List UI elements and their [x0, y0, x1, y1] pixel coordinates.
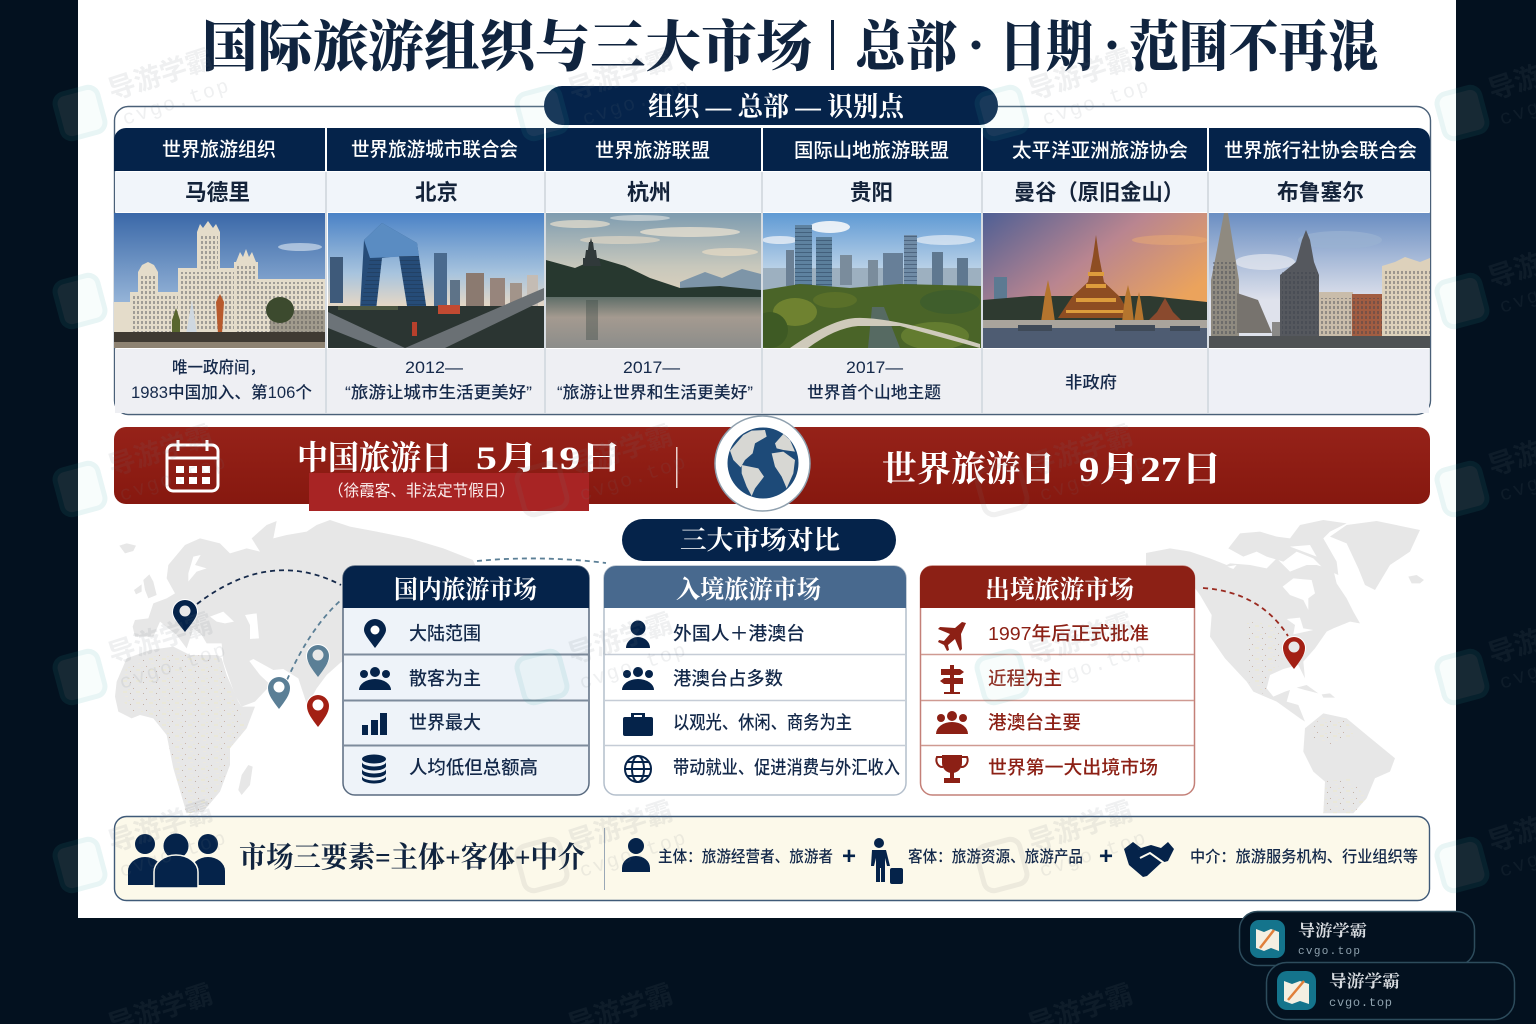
plus sign: + [1099, 843, 1113, 870]
photo: Beijing CCTV skyline [328, 213, 544, 348]
panel: outbound market: 1997年后正式批准 [988, 623, 1149, 644]
banner: tourism days [114, 416, 1430, 511]
watermarks: 导游学霸 [105, 44, 217, 106]
heading: three elements formula: 市场三要素=主体+客体+中介 [239, 841, 585, 874]
panel: domestic market: 人均低但总额高 [409, 757, 538, 778]
World tourism day text: 世界旅游日 [882, 450, 1055, 489]
logo card upper: 导游学霸 [1298, 922, 1367, 940]
icon: group [359, 667, 391, 690]
watermarks: 导游学霸 [565, 420, 677, 482]
watermarks: cvgo.top [1040, 75, 1154, 132]
watermarks: cvgo.top [1037, 451, 1151, 508]
watermarks: cvgo.top [1037, 827, 1151, 884]
watermarks: 导游学霸 [565, 44, 677, 106]
notes row: 1983中国加入、第106个 [131, 383, 312, 402]
icon: group [622, 667, 654, 690]
panel: domestic market: 散客为主 [409, 668, 481, 689]
World tourism day text: 9月27日 [1079, 450, 1222, 489]
headquarters city row: 曼谷（原旧金山） [1014, 180, 1184, 205]
intermediary text: 中介：旅游服务机构、行业组织等 [1190, 848, 1418, 866]
watermarks: cvgo.top [577, 451, 691, 508]
object text: 客体：旅游资源、旅游产品 [908, 847, 1083, 866]
China tourism day text: 5月19日 [476, 441, 622, 477]
icon: handshake [1124, 842, 1174, 877]
icon: group [936, 711, 968, 734]
map pin: blue 1 [306, 644, 330, 677]
panel: outbound market: 世界第一大出境市场 [988, 757, 1158, 778]
panel: inbound market: 外国人＋港澳台 [673, 623, 805, 644]
headquarters city row: 北京 [415, 180, 458, 205]
logo card upper: cvgo.top [1298, 946, 1360, 958]
watermarks: 导游学霸 [565, 608, 677, 670]
panel: inbound market: 带动就业、促进消费与外汇收入 [673, 757, 900, 778]
watermarks: 导游学霸 [1025, 608, 1137, 670]
icon: signpost [940, 665, 964, 694]
title: 日期 [999, 3, 1093, 82]
photo: Hangzhou West Lake [546, 213, 761, 348]
world map: Americas [1146, 520, 1424, 813]
title: 范围不再混 [1129, 3, 1378, 82]
icon: traveller with luggage [871, 838, 903, 884]
logo card lower: cvgo.top [1329, 996, 1392, 1010]
China tourism day text [297, 440, 622, 477]
title: 国际旅游组织与三大市场 [202, 3, 812, 82]
icon: person [622, 838, 650, 872]
headquarters city row [115, 172, 1430, 212]
panel: domestic market: 国内旅游市场 [394, 576, 537, 604]
headquarters city row: 贵阳 [850, 180, 893, 205]
title [202, 3, 1378, 82]
map pin: navy [172, 599, 198, 632]
World tourism day text [882, 450, 1222, 489]
Africa speckled land tint [120, 652, 247, 813]
table header row: 世界旅游联盟 [595, 140, 710, 162]
subject text: 主体：旅游经营者、旅游者 [658, 848, 833, 866]
watermarks: cvgo.top [577, 827, 691, 884]
notes row: 2017— [846, 359, 904, 377]
icon: person [626, 620, 650, 648]
sub note [309, 473, 589, 511]
icon: three people [128, 833, 225, 888]
panel: organisations table [114, 86, 1430, 414]
watermarks: 导游学霸 [105, 420, 217, 482]
watermarks: cvgo.top [120, 75, 234, 132]
table header row: 太平洋亚洲旅游协会 [1012, 140, 1188, 162]
sub note: （徐霞客、非法定节假日） [328, 482, 515, 500]
icon: bars [362, 713, 387, 735]
notes row: 世界首个山地主题 [807, 383, 941, 402]
section pill: market comparison [622, 519, 896, 561]
panel: inbound market: 入境旅游市场 [676, 576, 821, 604]
watermarks: cvgo.top [580, 75, 694, 132]
icon: coins stack [362, 754, 386, 784]
icon: globe [715, 416, 810, 511]
map pin: red [306, 694, 330, 727]
notes row: “旅游让世界和生活更美好” [557, 383, 753, 402]
panel: domestic market [343, 566, 589, 795]
watermarks: cvgo.top [1037, 639, 1151, 696]
icon: globe grid [625, 756, 651, 782]
map pin: America red [1282, 636, 1306, 669]
icon: calendar [167, 440, 218, 491]
section pill: organisation heading: 组织 — 总部 — 识别点 [648, 92, 906, 122]
world map: Eurasia and Africa [115, 520, 477, 813]
headquarters city row: 马德里 [185, 180, 250, 205]
photo: Madrid palace [114, 213, 325, 348]
logo card lower [1266, 962, 1514, 1020]
icon: plane [938, 622, 966, 651]
panel: inbound market: 以观光、休闲、商务为主 [673, 712, 852, 733]
panel: outbound market: 近程为主 [988, 668, 1062, 689]
panel: outbound market [920, 566, 1195, 795]
Americas speckled land tint [1247, 622, 1367, 813]
watermarks: 导游学霸 [105, 608, 217, 670]
route arcs [197, 558, 1288, 680]
watermarks: cvgo.top [117, 451, 231, 508]
watermarks: 导游学霸 [1025, 796, 1137, 858]
plus sign: + [842, 843, 856, 870]
icon: trophy [936, 755, 968, 783]
watermarks: 导游学霸 [105, 796, 217, 858]
photo: Brussels Grand Place [1209, 213, 1430, 348]
logo icon [1277, 971, 1316, 1010]
watermarks: cvgo.top [117, 639, 231, 696]
panel: outbound market: 港澳台主要 [988, 712, 1081, 733]
watermarks: 导游学霸 [565, 796, 677, 858]
notes row: “旅游让城市生活更美好” [345, 383, 532, 402]
section pill: market comparison: 三大市场对比 [680, 526, 840, 555]
panel: inbound market [604, 566, 906, 795]
photo: Bangkok Wat Arun [983, 213, 1208, 348]
notes row: 非政府 [1065, 372, 1117, 392]
notes row: 2017— [623, 359, 681, 377]
logo icon [1250, 920, 1285, 958]
notes row: 唯一政府间， [172, 357, 265, 377]
logo card upper [1240, 912, 1474, 966]
headquarters city row: 布鲁塞尔 [1277, 180, 1364, 205]
watermarks: cvgo.top [117, 827, 231, 884]
panel: domestic market: 世界最大 [409, 712, 481, 733]
notes row: 2012— [405, 359, 464, 377]
watermarks: 导游学霸 [1025, 44, 1137, 106]
logo card lower: 导游学霸 [1329, 972, 1400, 991]
photo: Guiyang city [752, 213, 981, 350]
panel: inbound market: 港澳台占多数 [673, 668, 783, 689]
China tourism day text: 中国旅游日 [297, 440, 452, 477]
icon: pin [364, 619, 386, 648]
section pill: organisation heading [544, 86, 998, 125]
notes row [115, 172, 1429, 413]
panel: outbound market: 出境旅游市场 [985, 576, 1134, 604]
title: 总部 [855, 3, 957, 82]
panel: domestic market: 大陆范围 [409, 623, 481, 644]
table header row: 世界旅行社协会联合会 [1224, 140, 1417, 162]
table header row: 世界旅游城市联合会 [351, 139, 518, 161]
table header row: 世界旅游组织 [162, 139, 276, 161]
headquarters city row: 杭州 [627, 180, 671, 205]
table header row [114, 128, 1430, 171]
watermarks: 导游学霸 [1025, 420, 1137, 482]
icon: suitcase [623, 713, 653, 736]
map pin: blue 2 [267, 676, 291, 709]
watermarks: cvgo.top [577, 639, 691, 696]
panel: market three elements [114, 816, 1430, 900]
table header row: 国际山地旅游联盟 [794, 140, 949, 162]
